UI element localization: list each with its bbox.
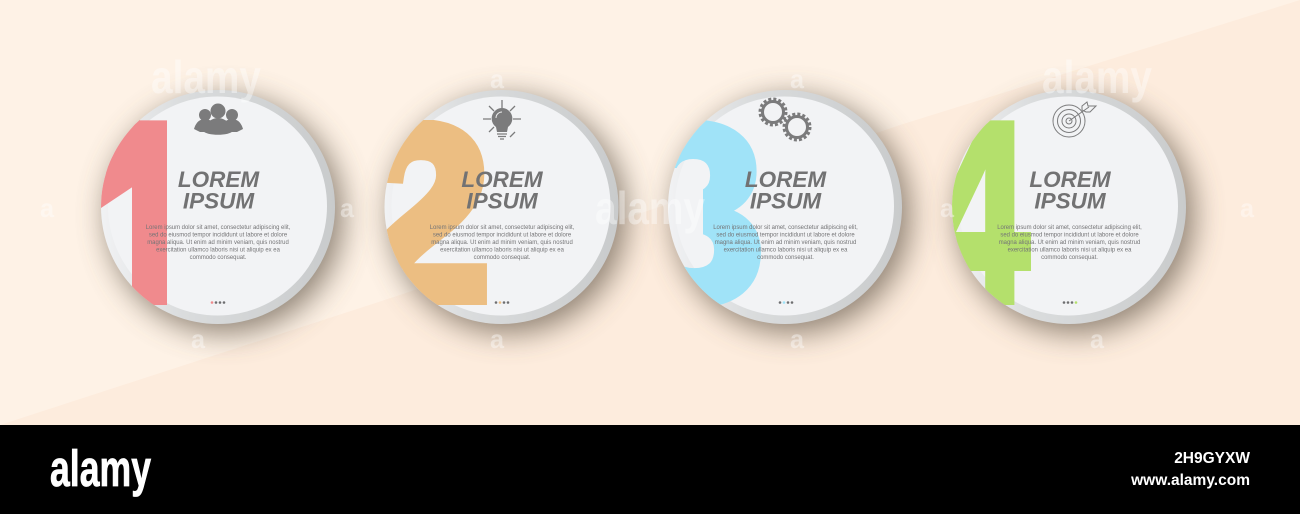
body text: sed do eiusmod tempor incididunt ut labore et dolore — [716, 232, 855, 238]
body text — [146, 225, 291, 261]
body text — [997, 225, 1142, 261]
icon: people — [194, 104, 243, 135]
watermarks: a — [191, 324, 206, 354]
body text: Lorem ipsum dolor sit amet, consectetur adipiscing elit, — [146, 225, 291, 231]
watermarks: a — [790, 64, 805, 94]
icon: light bulb — [483, 100, 521, 139]
pagination dots — [779, 301, 793, 304]
watermarks: a — [1240, 193, 1255, 223]
body text: Lorem ipsum dolor sit amet, consectetur adipiscing elit, — [430, 225, 575, 231]
watermarks: a — [490, 324, 505, 354]
icon: target — [1053, 102, 1096, 137]
heading: IPSUM — [1034, 188, 1107, 214]
watermarks: alamy — [595, 182, 705, 234]
watermarks: a — [40, 193, 55, 223]
panel: step 4 — [925, 66, 1194, 361]
watermarks: alamy — [151, 51, 261, 103]
numeral 3: 3 — [626, 74, 764, 352]
icon: gears — [760, 99, 810, 140]
body text: sed do eiusmod tempor incididunt ut labore et dolore — [1000, 232, 1139, 238]
watermarks: a — [790, 324, 805, 354]
body text: sed do eiusmod tempor incididunt ut labore et dolore — [433, 232, 572, 238]
panel: step 2 — [353, 76, 626, 351]
website: www.alamy.com — [1130, 472, 1250, 489]
numeral 1 — [101, 120, 167, 305]
heading — [745, 167, 827, 214]
body text: commodo consequat. — [1041, 255, 1098, 261]
body text: magna aliqua. Ut enim ad minim veniam, quis nostrud — [999, 240, 1140, 246]
body text: exercitation ullamco laboris nisi ut aliquip ex ea — [724, 248, 848, 254]
pagination dots — [211, 301, 225, 304]
body text: magna aliqua. Ut enim ad minim veniam, quis nostrud — [147, 240, 289, 246]
pagination dots — [495, 301, 509, 304]
heading: LOREM — [745, 167, 827, 192]
watermarks: a — [1090, 324, 1105, 354]
watermarks: a — [490, 64, 505, 94]
body text — [713, 225, 858, 261]
body text: commodo consequat. — [190, 255, 247, 261]
panel: step 1 — [69, 66, 343, 361]
watermarks: alamy — [1042, 51, 1152, 103]
body text: magna aliqua. Ut enim ad minim veniam, quis nostrud — [715, 240, 856, 246]
watermarks: a — [940, 193, 955, 223]
body text: exercitation ullamco laboris nisi ut aliquip ex ea — [156, 248, 281, 254]
body text: sed do eiusmod tempor incididunt ut labore et dolore — [149, 232, 288, 238]
body text — [430, 225, 575, 261]
body text: commodo consequat. — [474, 255, 531, 261]
pagination dots — [1063, 301, 1077, 304]
body text: Lorem ipsum dolor sit amet, consectetur adipiscing elit, — [997, 225, 1142, 231]
numeral 1: 1 — [69, 66, 216, 361]
heading: IPSUM — [466, 188, 539, 214]
watermarks — [40, 51, 1255, 354]
body text: magna aliqua. Ut enim ad minim veniam, quis nostrud — [431, 240, 573, 246]
heading: IPSUM — [750, 188, 822, 214]
heading: LOREM — [1029, 167, 1112, 192]
body text: exercitation ullamco laboris nisi ut aliquip ex ea — [1008, 248, 1132, 254]
numeral 4 — [952, 120, 1031, 305]
heading — [178, 167, 260, 214]
heading: LOREM — [461, 167, 544, 192]
heading: IPSUM — [183, 188, 255, 214]
body text: exercitation ullamco laboris nisi ut aliquip ex ea — [440, 248, 565, 254]
watermarks: a — [340, 193, 355, 223]
panel: step 3 — [626, 74, 910, 352]
numeral 2: 2 — [353, 76, 490, 351]
heading — [1029, 167, 1112, 214]
heading: LOREM — [178, 167, 260, 192]
heading — [461, 167, 544, 214]
numeral 4: 4 — [925, 66, 1031, 361]
body text: Lorem ipsum dolor sit amet, consectetur adipiscing elit, — [713, 225, 858, 231]
image id: 2H9GYXW — [1174, 450, 1250, 467]
footer bar — [0, 425, 1300, 514]
body text: commodo consequat. — [757, 255, 814, 261]
footer logo: alamy — [50, 440, 151, 497]
